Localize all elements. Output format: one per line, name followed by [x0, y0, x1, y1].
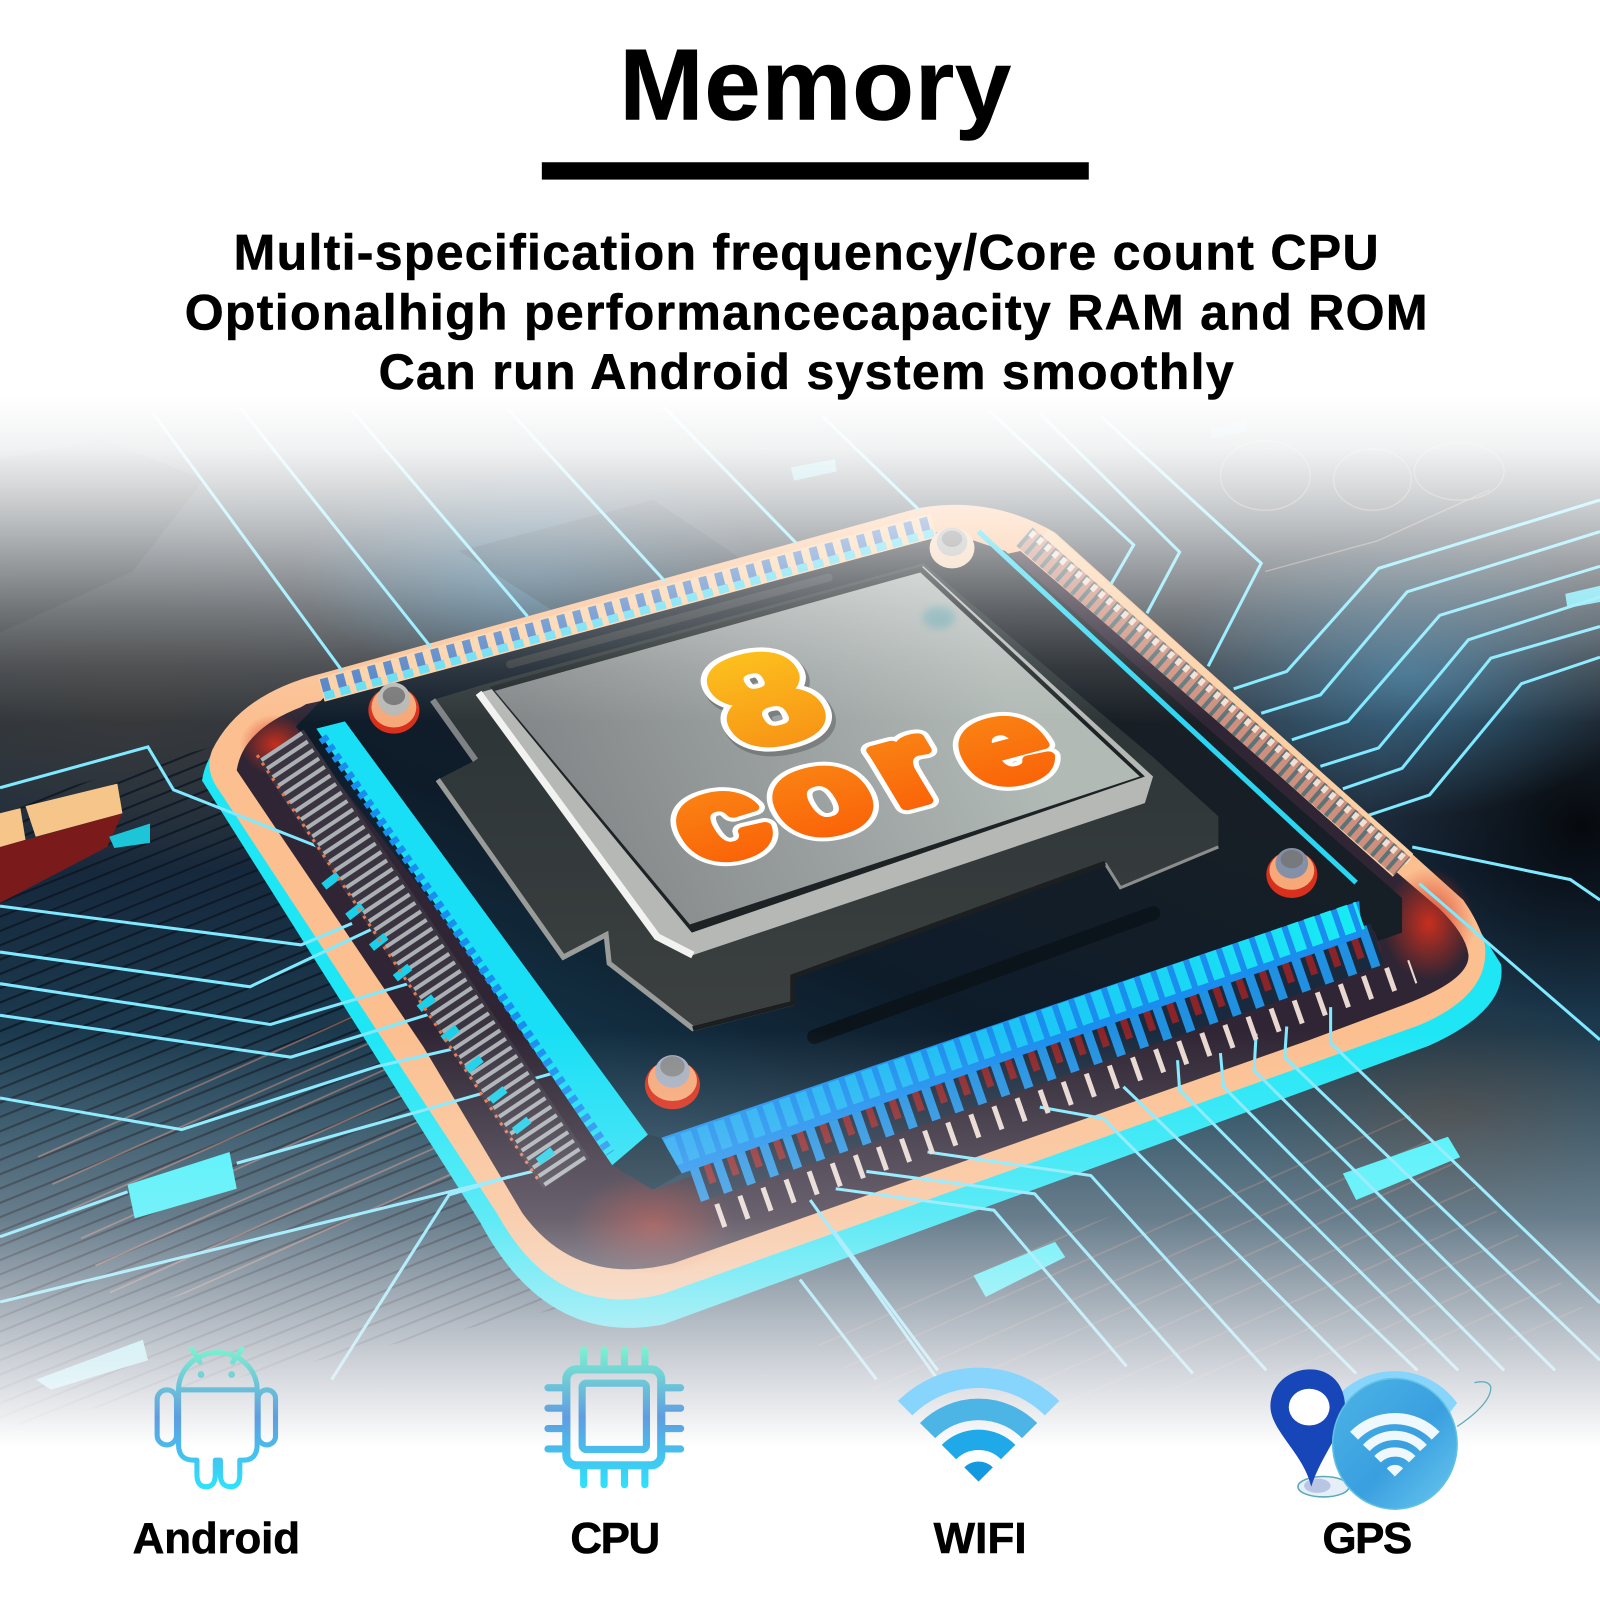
left cyan pin strip — [316, 721, 648, 1165]
circuit board background — [0, 398, 1600, 1445]
top pin row — [321, 522, 934, 696]
top fade overlay — [0, 396, 1600, 722]
word core — [641, 674, 1077, 889]
feature: Android — [133, 1349, 300, 1563]
icon: gps pin and globe — [1270, 1369, 1491, 1509]
feature: WIFI — [905, 1378, 1052, 1563]
label: CPU: CPU — [570, 1514, 660, 1563]
small circuit blocks — [0, 420, 1600, 1390]
description text: Multi-specification frequency/Core count CPU — [234, 224, 1379, 280]
left grey pins — [257, 745, 566, 1184]
board slots — [510, 578, 1153, 1037]
digit 8: 8 — [685, 628, 853, 780]
right pin row — [1024, 533, 1408, 866]
chip outer band: peach — [209, 505, 1485, 1299]
label: GPS: GPS — [1322, 1514, 1412, 1563]
word core: r — [839, 698, 968, 831]
digit 8: 8 — [682, 624, 850, 776]
description text — [185, 224, 1428, 400]
8 core label — [641, 624, 1077, 889]
bottom pins — [694, 941, 1413, 1216]
chip inner recess — [237, 551, 1468, 1269]
red glows in chip corners — [240, 714, 1474, 1276]
bolt bottom — [645, 1055, 700, 1109]
title: Memory — [619, 29, 1011, 141]
word core: c — [641, 749, 794, 889]
processor lower body — [433, 563, 1218, 1029]
label: WIFI: WIFI — [934, 1514, 1027, 1563]
bolt top right — [930, 528, 974, 568]
word core: o — [737, 723, 898, 864]
processor silver rim — [479, 566, 1153, 955]
icon: android robot — [157, 1349, 276, 1487]
icon: wifi — [905, 1378, 1052, 1482]
processor dark inner edge — [490, 566, 1145, 933]
right cyan line — [979, 532, 1356, 883]
bottom fade overlay — [0, 1031, 1600, 1447]
feature: CPU — [548, 1350, 681, 1563]
description text: Can run Android system smoothly — [379, 344, 1234, 400]
word core: r — [839, 698, 968, 831]
mounting bolts — [368, 528, 1317, 1109]
feature: GPS — [1270, 1369, 1491, 1563]
processor top plate — [495, 572, 1140, 924]
word core: o — [737, 723, 898, 864]
chip outer band: cyan — [202, 689, 1502, 1328]
plate smudge — [922, 606, 955, 629]
title underline — [542, 162, 1089, 180]
chip substrate — [296, 531, 1402, 1190]
bolt top left — [368, 683, 419, 734]
bolt right — [1266, 848, 1317, 898]
word core: e — [924, 674, 1077, 813]
circuit traces — [0, 406, 1600, 1380]
digit 8: 8 — [682, 624, 850, 776]
word core: e — [924, 674, 1077, 813]
label: Android: Android — [133, 1514, 300, 1563]
word core: c — [641, 749, 794, 889]
corner blue trim — [612, 1135, 682, 1190]
icon: cpu chip — [548, 1350, 681, 1485]
bottom cyan pin strip — [661, 901, 1362, 1173]
description text: Optionalhigh performancecapacity RAM and ROM — [185, 285, 1428, 341]
